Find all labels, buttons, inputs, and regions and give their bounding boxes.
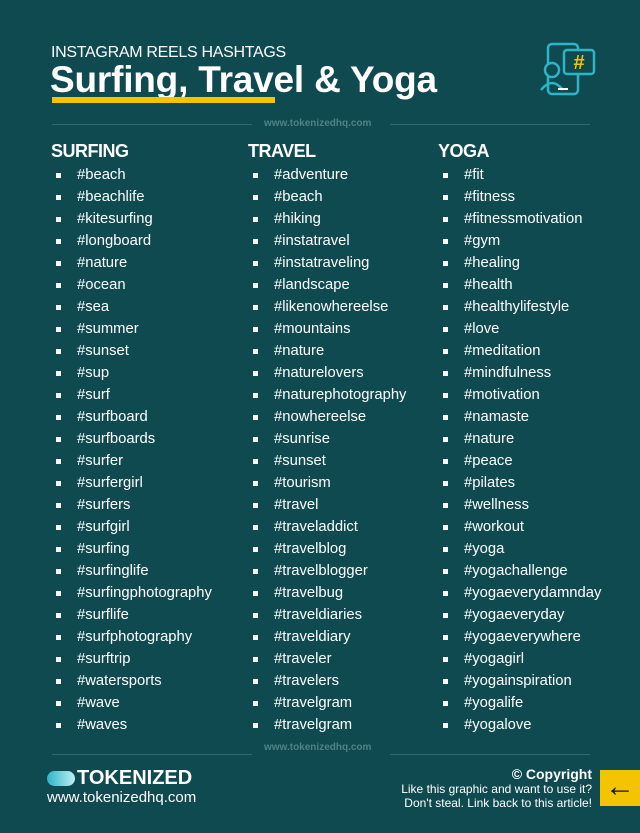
panel: yoga: #motivation (464, 387, 540, 403)
copyright note: Don't steal. Link back to this article! (404, 796, 592, 810)
panel: travel: #naturelovers (274, 365, 364, 381)
panel: yoga: #namaste (464, 409, 529, 425)
panel: surfing: #surfinglife (77, 563, 149, 579)
panel: yoga: #healing (464, 255, 520, 271)
panel: travel: #naturephotography (274, 387, 406, 403)
panel: travel: #traveler (274, 651, 332, 667)
icon: phone hashtag (540, 42, 596, 96)
panel: yoga: #yogalove (464, 717, 531, 733)
panel: surfing: #surflife (77, 607, 129, 623)
panel: yoga: #healthylifestyle (464, 299, 569, 315)
panel: yoga: #pilates (464, 475, 515, 491)
panel: surfing: #watersports (77, 673, 162, 689)
panel: surfing: #surfphotography (77, 629, 192, 645)
panel: travel: #likenowhereelse (274, 299, 388, 315)
title underline (52, 97, 275, 103)
panel: yoga: #yogaeverywhere (464, 629, 581, 645)
panel: yoga: #peace (464, 453, 513, 469)
panel: yoga (438, 141, 602, 733)
panel: surfing (51, 141, 212, 733)
title: Surfing, Travel & Yoga (50, 59, 437, 100)
panel: surfing: #sup (77, 365, 109, 381)
copyright note: © Copyright (512, 766, 592, 782)
panel: surfing: #surfing (77, 541, 130, 557)
subtitle: INSTAGRAM REELS HASHTAGS (51, 44, 286, 61)
panel: travel: #instatraveling (274, 255, 369, 271)
panel: surfing: #sunset (77, 343, 129, 359)
panel: surfing: #surfers (77, 497, 130, 513)
panel: travel: #travelgram (274, 717, 352, 733)
panel: surfing: #beachlife (77, 189, 144, 205)
panel: travel: #tourism (274, 475, 331, 491)
panel: yoga: #yogaeverydamnday (464, 585, 601, 601)
panel: surfing: #sea (77, 299, 109, 315)
panel: surfing: #surf (77, 387, 110, 403)
panel: travel: #traveldiary (274, 629, 350, 645)
panel: yoga: #yogalife (464, 695, 523, 711)
panel: yoga: #yoga (464, 541, 504, 557)
panel: surfing: #kitesurfing (77, 211, 153, 227)
panel: yoga: #nature (464, 431, 514, 447)
panel: travel (248, 141, 406, 733)
panel: surfing: #summer (77, 321, 139, 337)
panel: yoga: #fitnessmotivation (464, 211, 582, 227)
panel: travel: #travelblogger (274, 563, 368, 579)
panel: surfing: #surfergirl (77, 475, 143, 491)
panel: surfing: #surfboards (77, 431, 155, 447)
panel: yoga: #health (464, 277, 513, 293)
panel: surfing: #surftrip (77, 651, 130, 667)
text: www.tokenizedhq.com (264, 118, 371, 129)
panel: yoga: #meditation (464, 343, 540, 359)
panel: yoga: #mindfulness (464, 365, 551, 381)
panel: travel: #hiking (274, 211, 321, 227)
panel: surfing: SURFING (51, 141, 128, 161)
panel: yoga: #yogaeveryday (464, 607, 564, 623)
panel: travel: #instatravel (274, 233, 350, 249)
panel: travel: #travelers (274, 673, 339, 689)
panel: yoga: #gym (464, 233, 500, 249)
panel: yoga: #fit (464, 167, 484, 183)
panel: surfing: #longboard (77, 233, 151, 249)
panel: surfing: #nature (77, 255, 127, 271)
panel: travel: #nowhereelse (274, 409, 366, 425)
panel: travel: #travelgram (274, 695, 352, 711)
panel: travel: #nature (274, 343, 324, 359)
panel: surfing: #ocean (77, 277, 126, 293)
panel: travel: #beach (274, 189, 323, 205)
panel: travel: #travelbug (274, 585, 343, 601)
panel: surfing: #surfer (77, 453, 123, 469)
panel: travel: #travelblog (274, 541, 346, 557)
panel: travel: #traveldiaries (274, 607, 362, 623)
panel: surfing: #surfgirl (77, 519, 130, 535)
panel: yoga: YOGA (438, 141, 489, 161)
panel: travel: #adventure (274, 167, 348, 183)
arrow box (600, 770, 640, 806)
panel: travel: TRAVEL (248, 141, 316, 161)
panel: travel: #traveladdict (274, 519, 358, 535)
panel: yoga: #love (464, 321, 499, 337)
panel: surfing: #surfingphotography (77, 585, 212, 601)
panel: surfing: #beach (77, 167, 126, 183)
panel: yoga: #wellness (464, 497, 529, 513)
panel: yoga: #workout (464, 519, 524, 535)
copyright note: Like this graphic and want to use it? (401, 782, 592, 796)
arrow box: ← (605, 770, 635, 803)
logo: TOKENIZED (77, 767, 192, 789)
panel: travel: #mountains (274, 321, 350, 337)
icon: phone hashtag: # (573, 52, 585, 74)
panel: yoga: #yogainspiration (464, 673, 572, 689)
text: www.tokenizedhq.com (264, 742, 371, 753)
panel: surfing: #wave (77, 695, 120, 711)
panel: yoga: #yogachallenge (464, 563, 568, 579)
panel: surfing: #surfboard (77, 409, 148, 425)
logo (47, 767, 196, 806)
panel: surfing: #waves (77, 717, 127, 733)
panel: travel: #sunset (274, 453, 326, 469)
panel: travel: #landscape (274, 277, 350, 293)
copyright note (401, 766, 592, 810)
panel: yoga: #fitness (464, 189, 515, 205)
panel: travel: #travel (274, 497, 318, 513)
panel: travel: #sunrise (274, 431, 330, 447)
panel: yoga: #yogagirl (464, 651, 524, 667)
logo: www.tokenizedhq.com (47, 789, 196, 806)
